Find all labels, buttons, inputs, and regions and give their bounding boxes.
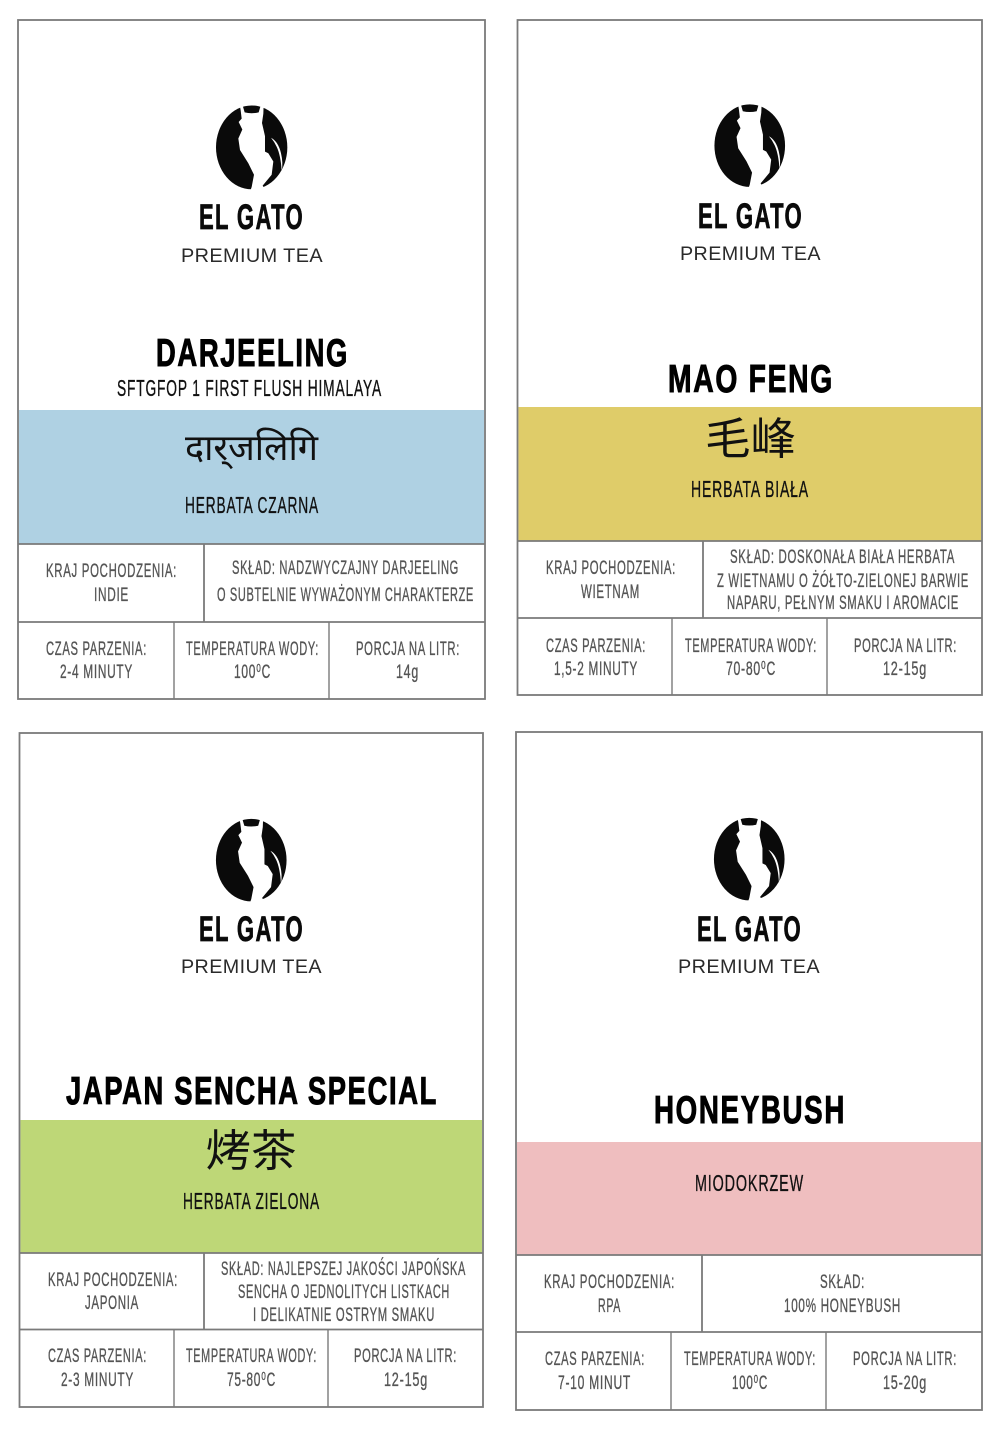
brand name: EL GATO (698, 197, 803, 236)
cell: composition (784, 1272, 901, 1317)
cell: water temperature (186, 639, 319, 683)
table grid (516, 1255, 982, 1332)
cell: composition: SKŁAD: NAJLEPSZEJ JAKOŚCI JAPOŃSKA (221, 1258, 466, 1280)
subheading: grade: SFTGFOP 1 FIRST FLUSH HIMALAYA (117, 375, 382, 401)
cell: brewing time: 7-10 MINUT (558, 1373, 631, 1394)
cell: water temperature: 100⁰C (732, 1373, 768, 1394)
cell: portion: 12-15g (883, 659, 927, 680)
cell: portion: PORCJA NA LITR: (354, 1346, 457, 1367)
tea type: HERBATA ZIELONA (183, 1188, 320, 1214)
cell: water temperature: TEMPERATURA WODY: (186, 639, 319, 660)
cell: brewing time: CZAS PARZENIA: (545, 1349, 645, 1370)
colour band: yellow (518, 407, 981, 541)
cell: portion: 15-20g (883, 1373, 927, 1394)
native script name: दार्‌जलिगि (185, 427, 319, 475)
heading: tea name: HONEYBUSH (654, 1089, 846, 1132)
cell: brewing time: 2-3 MINUTY (61, 1370, 134, 1391)
brand tagline: PREMIUM TEA (678, 956, 820, 978)
cell: portion (854, 636, 957, 680)
cell: composition: O SUBTELNIE WYWAŻONYM CHARAKTERZE (217, 585, 474, 606)
tea type: HERBATA BIAŁA (691, 476, 809, 502)
cell: composition: SKŁAD: NADZWYCZAJNY DARJEELING (232, 558, 459, 579)
cell: brewing time (546, 636, 646, 680)
cell: composition: SENCHA O JEDNOLITYCH LISTKACH (238, 1282, 450, 1303)
panel: Mao Feng label (518, 20, 982, 695)
cell: brewing time (545, 1349, 645, 1394)
cell: water temperature (685, 636, 817, 680)
cell: water temperature: 75-80⁰C (227, 1370, 276, 1391)
colour band: pink (517, 1142, 981, 1255)
heading: tea name: DARJEELING (156, 332, 349, 375)
heading: tea name: JAPAN SENCHA SPECIAL (66, 1070, 438, 1113)
heading: tea name: MAO FENG (668, 358, 834, 401)
cell: composition (217, 558, 474, 606)
icon: El Gato bean and cat logo (714, 817, 785, 905)
panel: Darjeeling label (18, 20, 485, 699)
native script name: 毛峰 (705, 403, 796, 467)
icon: El Gato bean and cat logo (714, 103, 785, 191)
cell: origin: KRAJ POCHODZENIA: (48, 1270, 178, 1291)
cell: portion (354, 1346, 457, 1391)
table grid (20, 1253, 483, 1330)
cell: portion (356, 639, 460, 683)
cell: water temperature (684, 1349, 816, 1394)
cell: composition (221, 1258, 466, 1326)
cell: origin: KRAJ POCHODZENIA: (544, 1272, 675, 1293)
cell: brewing time: CZAS PARZENIA: (46, 639, 147, 660)
brand name: EL GATO (199, 198, 304, 237)
cell: brewing time: CZAS PARZENIA: (546, 636, 646, 657)
icon: El Gato bean and cat logo (216, 818, 287, 906)
tea type: HERBATA CZARNA (185, 492, 319, 518)
cell: origin (46, 561, 177, 606)
panel: Honeybush label (516, 732, 982, 1410)
cell: water temperature: TEMPERATURA WODY: (186, 1346, 317, 1367)
cell: origin (546, 558, 676, 603)
cell: water temperature: TEMPERATURA WODY: (684, 1349, 816, 1370)
cell: origin: KRAJ POCHODZENIA: (46, 561, 177, 582)
cell: composition (717, 547, 969, 614)
cell: composition: I DELIKATNIE OSTRYM SMAKU (253, 1305, 435, 1326)
panel: Japan Sencha Special label (20, 733, 483, 1407)
cell: water temperature (186, 1346, 317, 1391)
icon: El Gato bean and cat logo (216, 104, 287, 194)
cell: brewing time: 2-4 MINUTY (60, 662, 133, 683)
brand tagline: PREMIUM TEA (181, 956, 322, 978)
cell: water temperature: TEMPERATURA WODY: (685, 636, 817, 657)
table grid (18, 544, 485, 622)
cell: composition: 100% HONEYBUSH (784, 1296, 901, 1317)
cell: composition: SKŁAD: (820, 1272, 865, 1293)
tea type: MIODOKRZEW (695, 1170, 804, 1196)
cell: origin: KRAJ POCHODZENIA: (546, 558, 676, 579)
cell: origin (544, 1272, 675, 1317)
cell: origin: RPA (598, 1296, 621, 1317)
native script name: 烤茶 (206, 1115, 296, 1179)
cell: origin (48, 1270, 178, 1314)
colour band: green (20, 1120, 482, 1253)
cell: origin: INDIE (94, 585, 129, 606)
cell: brewing time (46, 639, 147, 683)
cell: portion (853, 1349, 957, 1394)
brand tagline: PREMIUM TEA (680, 243, 821, 265)
cell: water temperature: 70-80⁰C (726, 659, 776, 680)
cell: brewing time: 1,5-2 MINUTY (554, 659, 638, 680)
brand name: EL GATO (199, 910, 304, 949)
cell: portion: PORCJA NA LITR: (356, 639, 460, 660)
table grid (518, 541, 982, 618)
cell: portion: 14g (396, 662, 419, 683)
cell: brewing time: CZAS PARZENIA: (48, 1346, 147, 1367)
brand name: EL GATO (697, 910, 802, 949)
cell: portion: 12-15g (384, 1370, 428, 1391)
brand tagline: PREMIUM TEA (181, 245, 323, 267)
cell: water temperature: 100⁰C (234, 662, 271, 683)
cell: origin: JAPONIA (85, 1293, 139, 1314)
colour band: blue (19, 410, 484, 544)
cell: brewing time (48, 1346, 147, 1391)
cell: origin: WIETNAM (581, 582, 640, 603)
